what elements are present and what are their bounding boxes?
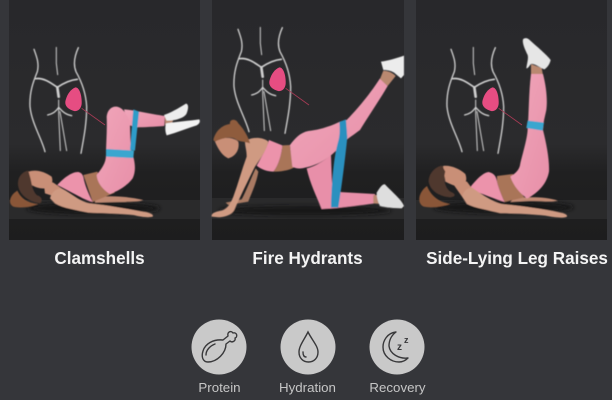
figure: woman doing fire hydrants xyxy=(212,56,404,217)
heading: Fire Hydrants: Fire Hydrants xyxy=(252,249,363,268)
anatomy diagram: glute highlight xyxy=(30,47,105,153)
figure: woman doing leg raises xyxy=(419,38,574,218)
panel: side-lying leg raises xyxy=(416,0,607,240)
heading: Clamshells: Clamshells xyxy=(54,249,145,268)
icon: protein drumstick xyxy=(192,320,246,374)
label: Hydration: Hydration xyxy=(279,380,336,395)
anatomy diagram: glute highlight xyxy=(234,27,309,133)
anatomy diagram: glute highlight xyxy=(447,47,522,153)
label: Recovery: Recovery xyxy=(369,380,426,395)
panel: fire hydrants xyxy=(212,0,404,240)
heading: Side-Lying Leg Raises: Side-Lying Leg Raises xyxy=(426,249,608,268)
panel: clamshells xyxy=(9,0,200,240)
figure: woman doing clamshells xyxy=(10,104,200,217)
label: Protein: Protein xyxy=(198,380,241,395)
icon: recovery moon: z xyxy=(397,342,402,353)
exercise mat xyxy=(212,198,404,219)
icon: recovery moon: z xyxy=(404,335,409,345)
exercise mat xyxy=(416,200,607,219)
icon: hydration droplet xyxy=(280,320,336,374)
exercise mat xyxy=(9,200,200,219)
icon: recovery moon xyxy=(370,320,424,374)
